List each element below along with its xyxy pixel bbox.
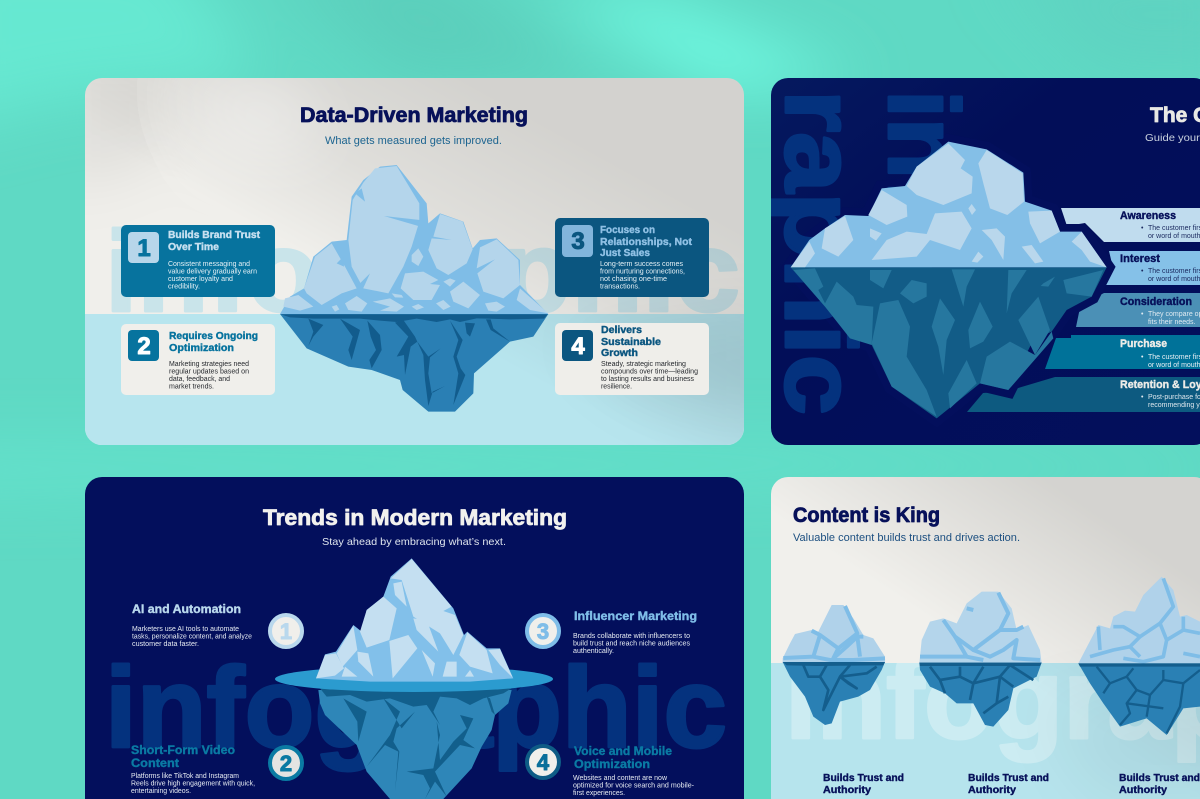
- vertical watermark: infog: [867, 90, 979, 334]
- stage: Consideration: fits their needs.: [1148, 319, 1196, 326]
- card 4 body: compounds over time—leading: [601, 368, 698, 376]
- item 3: Influencer Marketing: Influencer Marketing: [574, 609, 697, 623]
- panel: The Customer Journey: [764, 78, 1200, 445]
- card 2 body: data, feedback, and: [169, 376, 230, 383]
- badge 1: 1: [280, 619, 292, 644]
- item 4: Voice and Mobile Optimization: Optimization: [574, 757, 650, 771]
- label 1: Authority: [823, 784, 871, 796]
- card 2 body: Marketing strategies need: [169, 361, 249, 368]
- card 2 body: regular updates based on: [169, 368, 249, 376]
- number badge 3: [562, 225, 593, 257]
- item 4: Voice and Mobile Optimization: [573, 744, 695, 797]
- card 4 heading: Sustainable: [601, 337, 661, 348]
- vertical watermark: [771, 96, 963, 414]
- panel: Content is King: [771, 477, 1200, 799]
- iceberg group: [783, 577, 1200, 735]
- card 4 body: Steady, strategic marketing: [601, 361, 686, 368]
- item 2: Short-Form Video Content: entertaining videos.: [131, 788, 191, 795]
- label 3: [1119, 772, 1200, 796]
- card 2 heading: Optimization: [169, 343, 234, 354]
- stage: Consideration: Consideration: [1120, 296, 1192, 308]
- water band: [771, 663, 1200, 799]
- subtitle: Stay ahead by embracing what’s next.: [322, 536, 506, 548]
- stage: Retention and Loyalty: •: [1141, 394, 1144, 401]
- item 4: Voice and Mobile Optimization: Websites and content are now: [573, 775, 668, 782]
- label 2: Builds Trust and: [968, 772, 1049, 784]
- card 4 heading: Delivers: [601, 325, 642, 336]
- card 4 heading: [601, 325, 661, 359]
- label 1: [823, 772, 904, 796]
- item 3: Influencer Marketing: Brands collaborate with influencers to: [573, 633, 690, 640]
- stage: Interest: •: [1141, 268, 1144, 275]
- item 1: AI and Automation: AI and Automation: [132, 602, 241, 616]
- card 1 heading: Builds Brand Trust: [168, 230, 261, 241]
- item 4: Voice and Mobile Optimization: Voice and Mobile: [574, 744, 672, 758]
- title: Trends in Modern Marketing: [263, 505, 567, 530]
- stage: Interest: [1120, 254, 1200, 281]
- item 2: Short-Form Video Content: Reels drive high engagement with quick,: [131, 780, 255, 788]
- item 3: Influencer Marketing: authentically.: [573, 648, 614, 655]
- item 1: AI and Automation: [132, 602, 252, 648]
- card 3 body: transactions.: [600, 284, 640, 290]
- card 2 body: [169, 361, 249, 390]
- card 3 heading: Focuses on: [600, 225, 655, 236]
- iceberg halo: [986, 224, 1116, 399]
- item 4: Voice and Mobile Optimization: optimized for voice search and mobile-: [573, 782, 695, 790]
- card 1 heading: Over Time: [168, 242, 219, 253]
- card 3 heading: Just Sales: [600, 248, 650, 259]
- item 2: Short-Form Video Content: Short-Form Video: [131, 743, 235, 757]
- card 3 heading: Relationships, Not: [600, 237, 693, 248]
- label 2: Authority: [968, 784, 1016, 796]
- card 1: Builds Brand Trust: [121, 225, 275, 297]
- card 1 body: customer loyalty and: [168, 276, 233, 283]
- stage: Consideration: •: [1141, 311, 1144, 318]
- sea disc: [275, 666, 553, 692]
- number badge 2: [128, 330, 159, 361]
- card 2 heading: Requires Ongoing: [169, 331, 258, 342]
- card 2 body: market trends.: [169, 384, 214, 390]
- label 3: Builds Trust and: [1119, 772, 1200, 784]
- label 3: Authority: [1119, 784, 1167, 796]
- iceberg small: [783, 605, 885, 725]
- card 1 body: [168, 261, 257, 290]
- lighting shadow: [85, 78, 744, 445]
- card 2 heading: [169, 331, 258, 354]
- item 4: Voice and Mobile Optimization: first experiences.: [573, 790, 625, 797]
- card 1 heading: [168, 230, 260, 250]
- stage: Purchase: Purchase: [1120, 338, 1167, 350]
- badge 3: [527, 615, 559, 647]
- iceberg: trends: [275, 558, 553, 799]
- stage: Awareness: Awareness: [1120, 210, 1176, 222]
- watermark word: infographic: [105, 209, 740, 336]
- card 3 heading: [600, 225, 693, 259]
- badge 3: 3: [537, 619, 549, 644]
- card 1 body: value delivery gradually earn: [168, 268, 257, 276]
- number badge 4: [562, 330, 593, 361]
- badge 2: 2: [280, 751, 292, 776]
- title: Content is King: [793, 504, 940, 527]
- stage: Purchase: •: [1141, 354, 1144, 361]
- badge 1: [270, 615, 302, 647]
- iceberg: customer journey: [791, 142, 1107, 418]
- card 4 body: to lasting results and business: [601, 376, 694, 383]
- card 4 body: [601, 361, 698, 390]
- card 2: Requires Ongoing Optimization: [121, 324, 275, 395]
- panel: Trends in Modern Marketing: [85, 477, 744, 799]
- item 3: Influencer Marketing: [573, 609, 697, 655]
- panel: Data-Driven Marketing: [60, 60, 780, 445]
- number badge 2: 2: [137, 333, 151, 360]
- item 3: Influencer Marketing: build trust and reach niche audiences: [573, 640, 691, 648]
- card 1 body: Consistent messaging and: [168, 261, 250, 268]
- label 1: Builds Trust and: [823, 772, 904, 784]
- watermark word: infographic: [105, 645, 727, 772]
- lighting shadow: [771, 477, 1200, 799]
- card 3 body: [600, 261, 685, 290]
- card 3: Focuses on Relationships: [555, 218, 709, 297]
- subtitle: What gets measured gets improved.: [325, 135, 502, 147]
- stage: Purchase: [1120, 338, 1200, 369]
- number badge 1: [128, 232, 159, 263]
- card 3 body: not chasing one-time: [600, 276, 667, 283]
- item 1: AI and Automation: tasks, personalize content, and analyze: [132, 634, 252, 640]
- label 2: [968, 772, 1049, 796]
- card 3 body: Long-term success comes: [600, 261, 684, 268]
- stage: Interest: Interest: [1120, 253, 1160, 265]
- card 4: Delivers Sustainable Growth: [555, 323, 709, 395]
- stage: Awareness: [1120, 210, 1200, 240]
- item 2: Short-Form Video Content: Platforms like TikTok and Instagram: [131, 773, 239, 780]
- card 4 body: resilience.: [601, 384, 632, 390]
- title: Data-Driven Marketing: [300, 104, 528, 127]
- stage: Retention and Loyalty: [1120, 379, 1200, 409]
- funnel bands: [967, 208, 1200, 412]
- badge 4: 4: [537, 750, 550, 775]
- item 2: Short-Form Video Content: Content: [131, 756, 179, 770]
- number badge 1: 1: [137, 235, 151, 262]
- iceberg: data-driven: [280, 165, 548, 412]
- item 2: Short-Form Video Content: [131, 743, 255, 795]
- number badge 3: 3: [571, 228, 585, 255]
- iceberg medium: [919, 592, 1042, 727]
- subtitle: Valuable content builds trust and drives action.: [793, 532, 1020, 544]
- item 1: AI and Automation: Marketers use AI tools to automate: [132, 626, 239, 633]
- number badge 4: 4: [571, 333, 585, 360]
- badge 4: [527, 746, 559, 778]
- iceberg large: [1078, 577, 1200, 735]
- card 1 body: credibility.: [168, 284, 200, 290]
- water band: [85, 314, 744, 445]
- vertical watermark: raphic: [764, 90, 876, 415]
- stage: Awareness: •: [1141, 225, 1144, 232]
- item 1: AI and Automation: customer data faster.: [132, 641, 199, 648]
- badge 2: [270, 747, 302, 779]
- stage: Consideration: [1120, 296, 1200, 326]
- card 4 heading: Growth: [601, 348, 638, 359]
- card 3 body: from nurturing connections,: [600, 268, 685, 276]
